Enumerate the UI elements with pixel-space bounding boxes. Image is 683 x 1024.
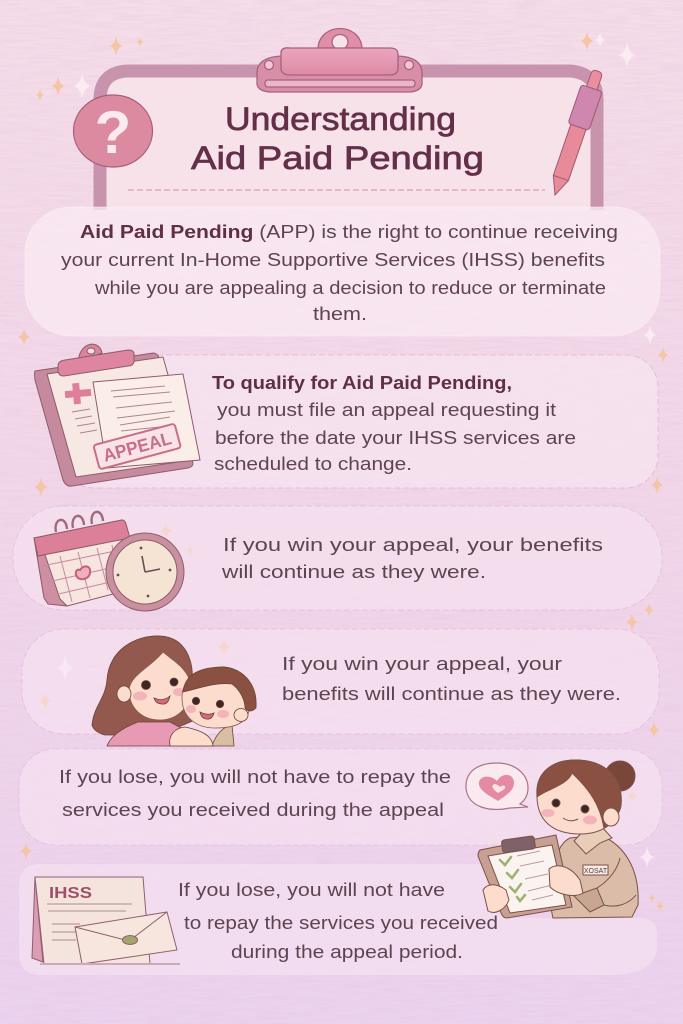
clock bbox=[106, 533, 184, 611]
panel: win appeal two: benefits will continue as they were. bbox=[282, 684, 621, 704]
checklist board bbox=[478, 835, 572, 918]
lose text two: If you lose, you will not have bbox=[178, 880, 445, 900]
qualify text: To qualify for Aid Paid Pending, bbox=[212, 373, 512, 393]
panel: definition: them. bbox=[313, 304, 367, 324]
panel: qualify: you must file an appeal requesting it bbox=[217, 400, 556, 420]
panel: definition: while you are appealing a decision to reduce or terminate bbox=[94, 278, 606, 298]
panel: win appeal one bbox=[13, 506, 662, 610]
icon: calendar and clock bbox=[34, 512, 184, 611]
illustration: case worker with checklist: XOSAT bbox=[584, 868, 608, 875]
title: Aid Paid Pending bbox=[191, 140, 484, 176]
panel: definition: your current In-Home Supportive Services (IHSS) benefits bbox=[61, 250, 605, 270]
title: Understanding bbox=[225, 101, 456, 137]
icon: IHSS letter and envelope: IHSS bbox=[49, 885, 92, 902]
clipboard frame bbox=[100, 71, 597, 210]
icon: appeal clipboard bbox=[34, 344, 200, 486]
header clipboard bbox=[100, 28, 597, 210]
medical cross bbox=[64, 382, 92, 405]
APPEAL stamp: APPEAL bbox=[101, 428, 174, 466]
icon: question mark badge: ? bbox=[95, 99, 131, 166]
illustration: mother and child bbox=[92, 636, 256, 746]
panel: lose notice two bbox=[19, 864, 657, 975]
icon: question mark badge bbox=[74, 95, 152, 167]
dashed divider bbox=[128, 189, 545, 191]
icon: IHSS letter and envelope bbox=[32, 877, 180, 964]
name badge bbox=[583, 865, 608, 875]
clip bbox=[78, 344, 102, 362]
icon: pen bbox=[545, 68, 608, 199]
panel: qualify bbox=[62, 355, 658, 488]
title bbox=[191, 101, 484, 176]
panel: qualify: before the date your IHSS services are bbox=[215, 428, 576, 448]
panel: lose notice two: during the appeal period. bbox=[231, 942, 463, 962]
panel: definition bbox=[25, 207, 660, 336]
lose text one: If you lose, you will not have to repay the bbox=[59, 767, 451, 787]
illustration: case worker with checklist bbox=[478, 760, 638, 918]
panel: win appeal two bbox=[22, 629, 659, 734]
win text two: If you win your appeal, your bbox=[282, 654, 562, 674]
panel: lose notice one bbox=[19, 749, 662, 845]
clipboard clip bbox=[257, 28, 422, 92]
definition text: Aid Paid Pending (APP) is the right to continue receiving bbox=[80, 222, 618, 242]
icon: heart speech bubble bbox=[466, 763, 528, 809]
win text one: If you win your appeal, your benefits bbox=[223, 535, 603, 555]
panel: lose notice two: to repay the services you received bbox=[184, 913, 498, 933]
panel: win appeal one: will continue as they were. bbox=[221, 562, 486, 582]
panel: qualify: scheduled to change. bbox=[214, 454, 412, 474]
panel: lose notice one: services you received during the appeal bbox=[62, 800, 444, 820]
